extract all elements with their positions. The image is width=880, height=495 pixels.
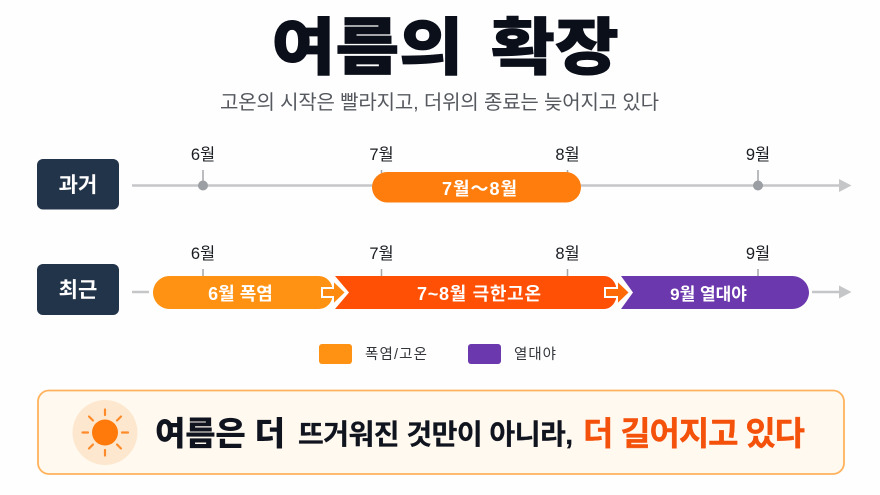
panel: recent timeline <box>37 244 852 315</box>
callout <box>38 390 844 474</box>
bar: September tropical nights: 9월 열대야 <box>670 285 747 304</box>
bar: June heatwave: 6월 폭염 <box>208 284 273 304</box>
callout text: middle: 뜨거워진 것만이 아니라, <box>298 419 573 450</box>
month marker: September: 9월 <box>746 244 770 263</box>
month marker: June <box>191 244 215 277</box>
month marker: September <box>746 244 770 277</box>
panel: past timeline <box>37 145 852 210</box>
callout panel <box>38 390 844 474</box>
arrow: June to July <box>322 280 346 305</box>
month marker: September: 9월 <box>746 145 770 164</box>
bar: June heatwave <box>153 276 333 309</box>
axis arrow: recent <box>812 286 852 298</box>
bar: July to August: 7월～8월 <box>442 179 517 199</box>
month marker: August <box>555 145 580 173</box>
legend item: tropical nights <box>468 344 556 364</box>
axis stub <box>132 291 149 293</box>
month marker: July <box>369 244 394 277</box>
legend item: heatwave <box>319 344 427 364</box>
bar: July to August <box>372 172 581 202</box>
bar: September tropical nights <box>621 276 809 309</box>
month marker: September <box>746 145 770 190</box>
month marker: August: 8월 <box>555 244 580 263</box>
month marker: July: 7월 <box>369 145 394 164</box>
bar: July to August extreme heat <box>335 276 617 309</box>
label: past: 과거 <box>59 174 97 197</box>
arrow: August to September <box>605 280 630 305</box>
bar: July to August extreme heat: 7~8월 극한고온 <box>417 284 541 304</box>
axis arrow: past <box>132 179 852 192</box>
label: past <box>37 159 119 210</box>
legend <box>319 344 556 364</box>
subtitle: 고온의 시작은 빨라지고, 더위의 종료는 늦어지고 있다 <box>220 91 659 114</box>
month marker: July: 7월 <box>369 244 394 263</box>
month marker: August <box>555 244 580 277</box>
label: recent: 최근 <box>59 279 97 302</box>
title <box>272 12 619 82</box>
month marker: June <box>191 145 215 190</box>
month marker: June: 6월 <box>191 145 215 164</box>
title: 여름의 <box>272 12 463 82</box>
month marker: August: 8월 <box>555 145 580 164</box>
legend item: heatwave: 폭염/고온 <box>365 346 427 363</box>
month marker: June: 6월 <box>191 244 215 263</box>
legend item: tropical nights: 열대야 <box>514 346 556 363</box>
icon: sun <box>72 400 138 465</box>
label: recent <box>37 264 119 315</box>
callout text: emphasis: 여름은 더 <box>155 415 285 452</box>
month marker: July <box>369 145 394 173</box>
callout text: highlight: 더 길어지고 있다 <box>583 415 805 452</box>
title: 확장 <box>491 12 619 82</box>
